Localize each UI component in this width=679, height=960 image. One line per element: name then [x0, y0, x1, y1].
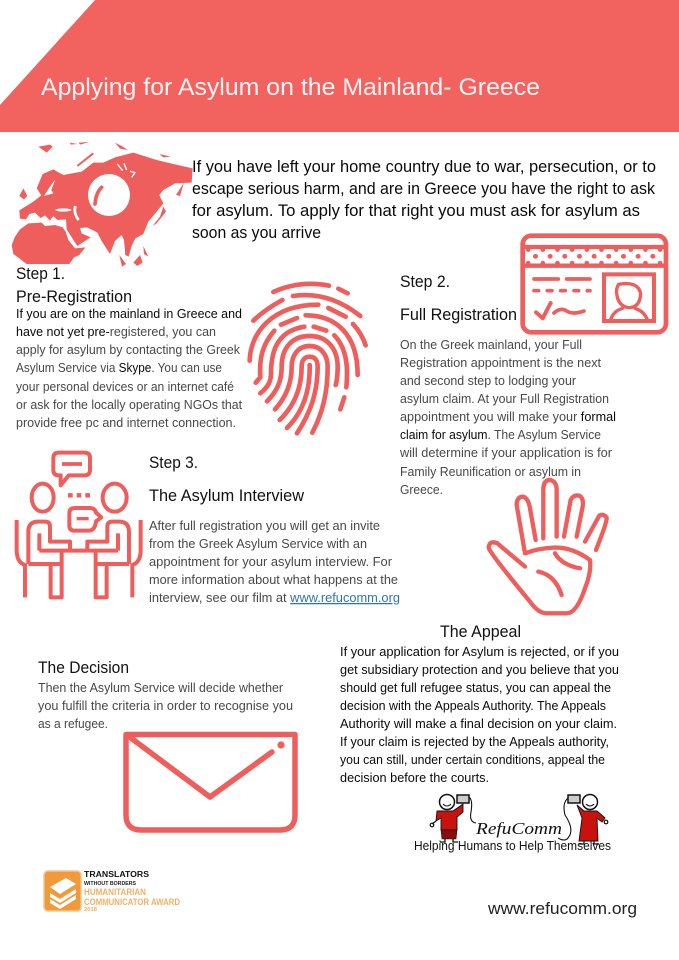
text: step 2 body: appointment you will make your formal — [400, 410, 616, 424]
text: step 2 body: claim for asylum. The Asylum Service — [400, 428, 601, 442]
heading: the decision: The Decision — [38, 659, 129, 677]
header banner — [0, 0, 679, 132]
text: step 3 body: After full registration you will get an invite — [149, 519, 380, 533]
text: decision body: Then the Asylum Service will decide whether — [38, 681, 283, 695]
text: appeal body — [340, 645, 619, 785]
intro text — [192, 158, 656, 242]
logo: Translators Without Borders award: 2018 — [84, 907, 97, 913]
panel: the appeal — [340, 623, 619, 785]
logo: Translators Without Borders award: WITHOUT BORDERS — [84, 881, 136, 887]
intro text: soon as you arrive — [192, 224, 321, 242]
intro text: If you have left your home country due to war, persecution, or to — [192, 158, 656, 176]
title: Applying for Asylum on the Mainland- Greece — [41, 74, 540, 101]
text: step 1 body — [16, 307, 243, 430]
heading: step 2: Full Registration — [400, 306, 517, 324]
icon: map of Eurasia and Africa — [12, 142, 193, 267]
text: step 1 body: apply for asylum by contacting the Greek — [16, 343, 241, 357]
text: step 2 body: Registration appointment is the next — [400, 356, 602, 370]
text: step 2 body: On the Greek mainland, your Full — [400, 338, 582, 352]
text: appeal body: decision with the Appeals Authority. The Appeals — [340, 699, 606, 713]
icon: interview — [17, 453, 141, 597]
text: appeal body: If your application for Asylum is rejected, or if you — [340, 645, 619, 659]
text: step 2 body: asylum claim. At your Full Registration — [400, 392, 609, 406]
text: step 3 body: appointment for your asylum interview. For — [149, 555, 392, 569]
text: step 2 body: Family Reunification or asylum in — [400, 465, 581, 479]
text: step 2 body — [399, 338, 616, 497]
text: appeal body: you can still, under certain conditions, appeal the — [340, 753, 605, 767]
text: appeal body: Authority will make a final decision on your claim. — [340, 717, 617, 731]
text: decision body: as a refugee. — [38, 717, 108, 731]
heading: step 1: Step 1. — [16, 265, 65, 283]
website url: www.refucomm.org — [487, 900, 637, 918]
heading: step 1 — [16, 265, 132, 306]
text: step 2 body: will determine if your application is for — [399, 446, 612, 460]
text: decision body — [38, 681, 293, 731]
text: decision body: you fulfill the criteria in order to recognise you — [38, 699, 293, 713]
heading: step 2 — [400, 273, 517, 324]
text: step 3 body: more information about what happens at the — [149, 573, 398, 587]
text: appeal body: decision before the courts. — [340, 771, 489, 785]
intro text: for asylum. To apply for that right you must ask for asylum as — [192, 202, 640, 220]
right figure — [558, 794, 608, 844]
icon: raised hand — [489, 480, 607, 613]
logo: Translators Without Borders award: COMMUNICATOR AWARD — [84, 897, 180, 907]
text: step 2 body: and second step to lodging your — [400, 374, 576, 388]
logo: Translators Without Borders award — [44, 870, 180, 913]
icon: books — [44, 871, 81, 911]
text: appeal body: If your claim is rejected by the Appeals authority, — [340, 735, 609, 749]
text: step 1 body: have not yet pre-registered, you can — [16, 325, 216, 339]
text: step 1 body: If you are on the mainland in Greece and — [16, 307, 242, 321]
heading: step 1: Pre-Registration — [16, 288, 132, 306]
award text: TRANSLATORS — [84, 870, 150, 879]
text: step 1 body: your personal devices or an internet café — [16, 380, 234, 394]
text: step 1 body: provide free pc and internet connection. — [16, 416, 236, 430]
intro text: escape serious harm, and are in Greece you have the right to ask — [192, 180, 656, 198]
icon: fingerprint — [250, 284, 366, 433]
text: step 2 body: Greece. — [400, 483, 443, 497]
text: step 1 body: Asylum Service via Skype. You can use — [16, 361, 222, 375]
panel: step 2 — [399, 273, 616, 497]
text: step 1 body: or ask for the locally operating NGOs that — [16, 398, 243, 412]
text: step 3 body — [149, 519, 400, 605]
text: step 3 body: from the Greek Asylum Service with an — [149, 537, 367, 551]
wordmark: RefuComm — [475, 819, 562, 838]
heading: the appeal: The Appeal — [440, 623, 521, 641]
heading: step 3: The Asylum Interview — [149, 487, 304, 505]
text: step 3 body: interview, see our film at www.refucomm.org — [149, 591, 400, 605]
panel: the decision — [38, 659, 293, 731]
text: appeal body: should get full refugee status, you can appeal the — [340, 681, 611, 695]
left figure — [430, 794, 476, 842]
icon: envelope — [126, 734, 295, 830]
panel: step 3 — [149, 454, 400, 605]
tagline: Helping Humans to Help Themselves — [414, 839, 611, 853]
logo: RefuComm — [414, 794, 611, 853]
logo: Translators Without Borders award: HUMANITARIAN — [84, 887, 146, 897]
heading: step 3: Step 3. — [149, 454, 198, 472]
heading: step 2: Step 2. — [400, 273, 450, 291]
icon: ID card — [523, 236, 666, 332]
heading: step 3 — [149, 454, 304, 505]
panel: step 1 — [16, 265, 243, 430]
text: appeal body: get subsidiary protection and you believe that you — [340, 663, 619, 677]
